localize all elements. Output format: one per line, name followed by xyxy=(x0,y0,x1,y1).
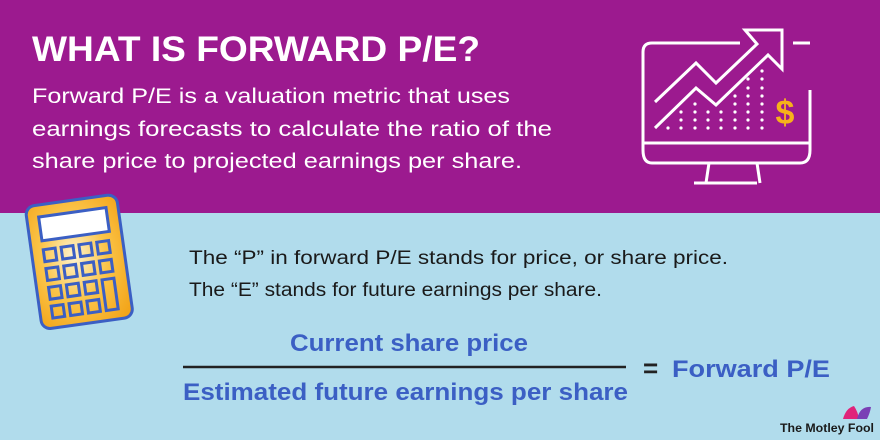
formula: Forward P/E xyxy=(672,356,830,383)
panel: purple header xyxy=(0,0,880,213)
formula: = xyxy=(643,353,658,383)
formula xyxy=(183,330,830,406)
icon: dollar sign: $ xyxy=(776,94,795,132)
formula: Estimated future earnings per share xyxy=(183,379,628,406)
text block: definition xyxy=(32,85,552,173)
text block: explanation: The “E” stands for future earnings per share. xyxy=(189,280,602,301)
text block: explanation xyxy=(189,248,728,301)
title: WHAT IS FORWARD P/E? xyxy=(32,30,480,69)
logo: The Motley Fool xyxy=(780,406,874,435)
text block: definition: share price to projected earnings per share. xyxy=(32,150,522,173)
text block: definition: earnings forecasts to calculate the ratio of the xyxy=(32,118,552,141)
text block: definition: Forward P/E is a valuation metric that uses xyxy=(32,85,510,108)
icon: calculator xyxy=(25,194,133,330)
icon: monitor with rising chart xyxy=(643,30,810,183)
text block: explanation: The “P” in forward P/E stands for price, or share price. xyxy=(189,248,728,269)
logo: The Motley Fool: The Motley Fool xyxy=(780,423,874,435)
formula: Current share price xyxy=(290,330,528,357)
